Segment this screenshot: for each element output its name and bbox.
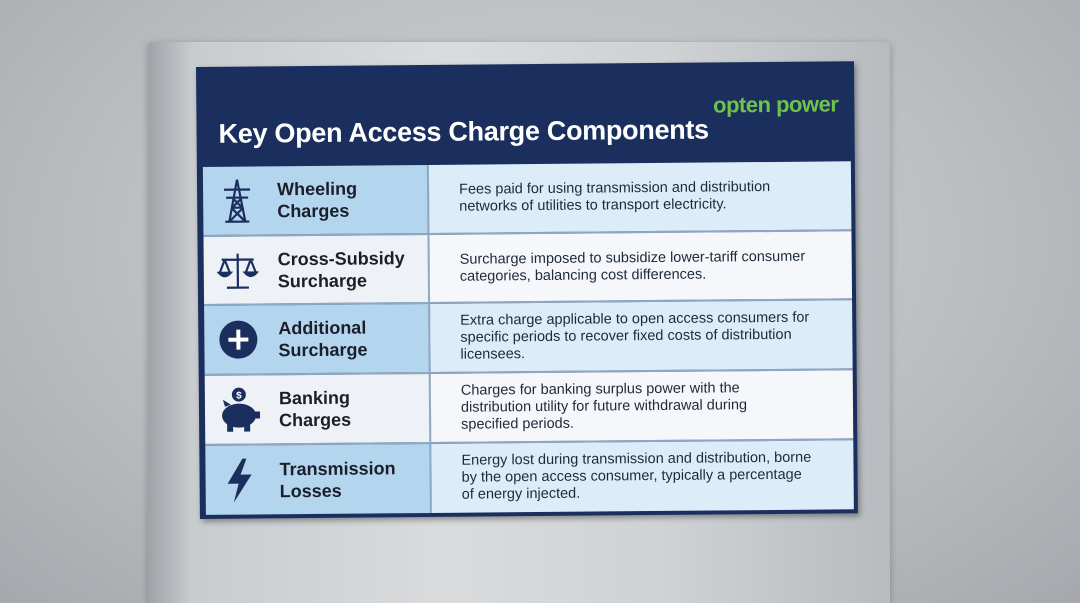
- row: banking charges: Banking: [279, 388, 350, 408]
- row: wheeling charges: [203, 161, 851, 237]
- icon: piggy bank: $: [236, 391, 242, 402]
- row: cross-subsidy surcharge: [203, 231, 852, 306]
- row: wheeling charges: Fees paid for using transmission and distribution: [459, 179, 770, 198]
- row: transmission losses: [205, 440, 854, 515]
- row: banking charges: distribution utility for future withdrawal during: [461, 397, 747, 415]
- metal panel: [148, 42, 890, 603]
- logo: opten power: [713, 91, 838, 117]
- row: banking charges: specified periods.: [461, 415, 574, 432]
- row: additional surcharge: specific periods to recover fixed costs of distribution: [460, 326, 792, 345]
- table: [202, 161, 854, 515]
- icon: scales: [216, 254, 259, 289]
- row: transmission losses: Energy lost during transmission and distribution, borne: [461, 450, 811, 469]
- row: additional surcharge: Extra charge applicable to open access consumers for: [460, 309, 809, 328]
- icon: plus circle: [219, 320, 258, 359]
- row: additional surcharge: Additional: [278, 318, 366, 338]
- row: cross-subsidy surcharge: categories, balancing cost differences.: [460, 266, 706, 284]
- row: wheeling charges: Wheeling: [277, 179, 357, 199]
- row: transmission losses: of energy injected.: [462, 486, 580, 503]
- row: wheeling charges: Charges: [277, 201, 349, 221]
- row: additional surcharge: Surcharge: [278, 340, 368, 360]
- sign board: [196, 61, 858, 519]
- row: transmission losses: Losses: [280, 480, 342, 501]
- row: banking charges: [205, 370, 853, 446]
- row: cross-subsidy surcharge: Surcharge: [278, 270, 367, 291]
- row: cross-subsidy surcharge: Surcharge imposed to subsidize lower-tariff consumer: [460, 248, 805, 267]
- row: banking charges: Charges for banking surplus power with the: [461, 380, 740, 398]
- row: transmission losses: by the open access consumer, typically a percentage: [462, 467, 802, 486]
- icon: piggy bank: [222, 388, 260, 432]
- row: banking charges: Charges: [279, 410, 351, 430]
- row: transmission losses: Transmission: [279, 458, 396, 479]
- row: cross-subsidy surcharge: Cross-Subsidy: [278, 248, 405, 269]
- icon: lightning bolt: [228, 458, 252, 502]
- title: Key Open Access Charge Components: [218, 115, 709, 149]
- row: additional surcharge: licensees.: [460, 346, 525, 362]
- row: wheeling charges: networks of utilities to transport electricity.: [459, 196, 727, 215]
- icon: transmission tower: [224, 179, 250, 223]
- row: additional surcharge: [204, 300, 853, 376]
